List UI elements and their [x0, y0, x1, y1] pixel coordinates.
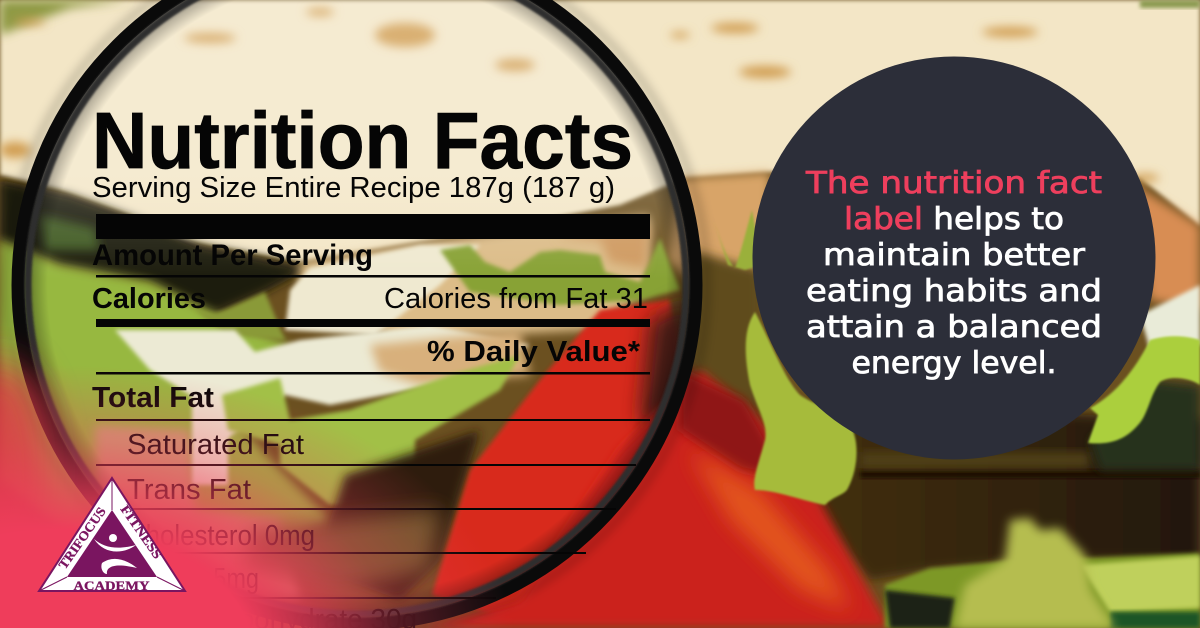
right dark green [1090, 380, 1200, 470]
total fat: Total Fat [92, 382, 214, 414]
cucumber dark skin [1110, 612, 1200, 628]
left dark strip [0, 180, 310, 314]
figure arms [94, 539, 136, 552]
cucumber pale flesh [1080, 556, 1200, 612]
brand text FITNESS: FITNESS [118, 502, 165, 562]
tomato darker top [680, 370, 790, 480]
left lettuce [0, 240, 330, 560]
bread toasted spots [0, 8, 1159, 182]
rule [96, 597, 496, 599]
amount per serving: Amount Per Serving [92, 239, 373, 272]
tomato orange highlight [690, 450, 850, 610]
top leaf fragment [712, 210, 762, 270]
lens outer blur [7, 0, 707, 628]
tan patch lower left [95, 425, 300, 600]
left edge red fade [0, 360, 50, 580]
centre lettuce leaf [746, 312, 857, 505]
lens top lettuce [440, 238, 680, 305]
green corner top-left [0, 0, 130, 35]
thick bar [96, 214, 650, 239]
cucumber dark left [885, 590, 955, 628]
lower brown bun [760, 400, 1200, 580]
calories: Calories [92, 283, 206, 315]
right tan filling [1130, 182, 1200, 310]
bread top [0, 0, 1200, 262]
sodium: Sodium 5mg [127, 563, 259, 595]
medium bar [96, 319, 650, 327]
outside red tomato [420, 370, 890, 628]
rule [96, 508, 616, 510]
rule [96, 372, 650, 374]
lens red tomato [432, 300, 690, 620]
saturated fat: Saturated Fat [127, 429, 304, 461]
logo: Trifocus Fitness Academy [39, 478, 185, 593]
figure head [109, 534, 117, 542]
olive lower lens [240, 510, 440, 590]
line two: label helps to [844, 202, 1064, 237]
pink gradient overlay [0, 300, 700, 628]
highlighted line one: The nutrition fact [805, 166, 1102, 201]
outer triangle [39, 478, 185, 591]
dark strip beyond lens [690, 250, 830, 500]
brand text ACADEMY: ACADEMY [74, 579, 150, 593]
figure legs [101, 559, 137, 574]
brand text TRIFOCUS: TRIFOCUS [55, 504, 109, 572]
magnifying lens [7, 0, 707, 628]
rule [96, 419, 650, 421]
tan filling through the lens [300, 215, 650, 340]
lettuce upper middle [195, 292, 285, 340]
centre tan filling [670, 172, 770, 290]
lens brightening [21, 0, 693, 621]
blurred foreground leaf [955, 518, 1115, 628]
white stem [192, 395, 228, 485]
white onion [115, 325, 530, 440]
lens rim [18, 0, 696, 624]
heading: Nutrition Facts: Nutrition Facts [92, 96, 633, 185]
line five: attain a balanced [806, 310, 1102, 345]
inner triangle [67, 510, 157, 577]
dark band [860, 470, 1200, 478]
cucumber body [885, 553, 1200, 628]
dark shadow in lens [320, 430, 480, 600]
lettuce lower middle [222, 355, 520, 505]
calories from fat: Calories from Fat 31 [384, 283, 648, 315]
lens rim inner band [28, 0, 686, 614]
green corner top-right [1140, 0, 1200, 8]
callout text [805, 166, 1102, 381]
trans fat: Trans Fat [127, 474, 251, 506]
line six: energy level. [852, 346, 1056, 381]
circle [752, 56, 1156, 460]
cholesterol: Cholesterol 0mg [127, 520, 315, 552]
tan piece [370, 330, 530, 385]
dark edge at right of the lens [640, 300, 690, 430]
orange blobs behind lettuce [555, 225, 650, 268]
nutrition facts label [92, 96, 650, 628]
right white filling [1140, 285, 1200, 350]
serving size: Serving Size Entire Recipe 187g (187 g) [92, 172, 615, 204]
pale onion band [285, 245, 480, 335]
line four: eating habits and [806, 274, 1102, 309]
rule [96, 464, 636, 466]
olive under circle [860, 452, 1090, 468]
panel: dark circle callout [752, 56, 1156, 460]
daily value: % Daily Value* [427, 336, 641, 368]
rule [96, 552, 586, 554]
left top lens green in strip [40, 215, 100, 250]
line three: maintain better [823, 238, 1086, 273]
lens edge shading [21, 0, 693, 621]
rule [96, 275, 650, 278]
divider lines [39, 478, 185, 591]
right lettuce [1088, 336, 1200, 443]
